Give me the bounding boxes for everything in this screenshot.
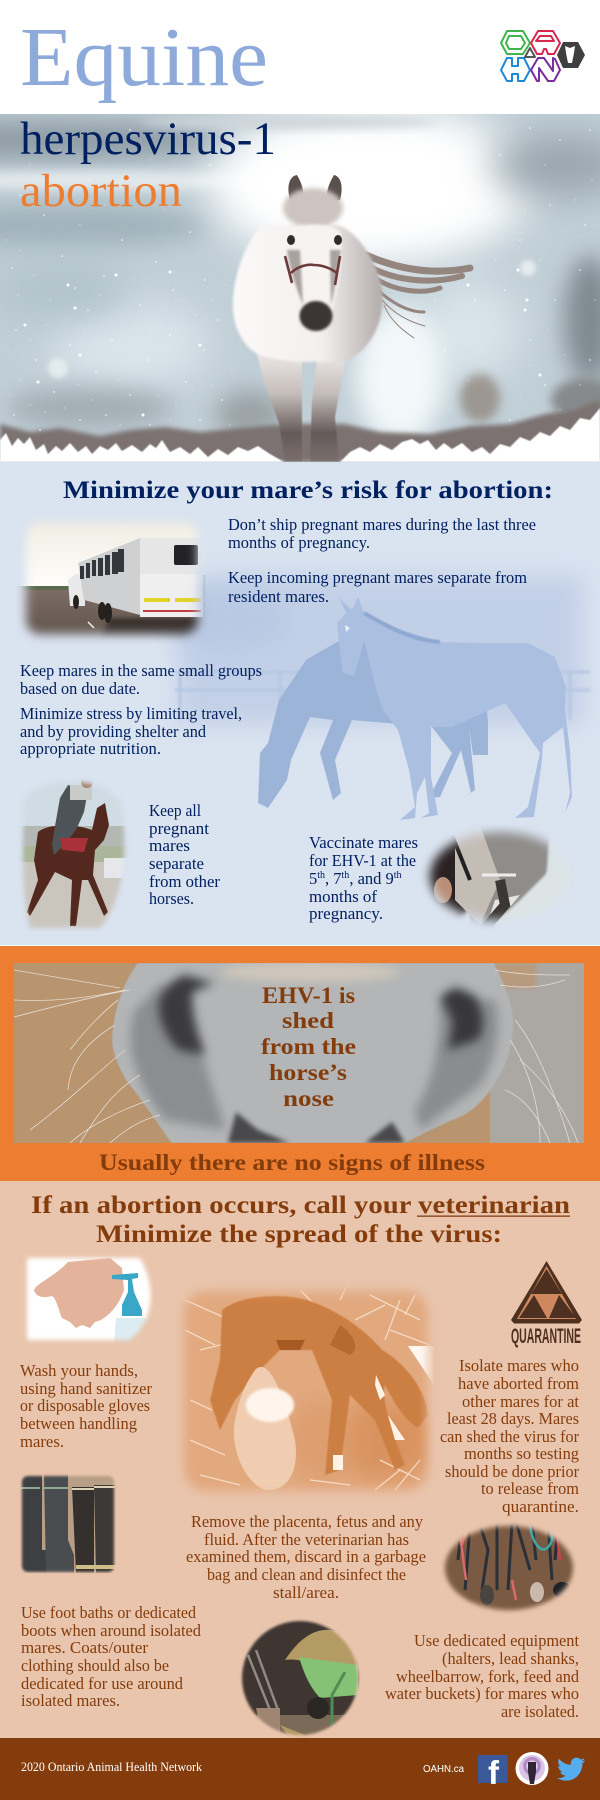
- head: [298, 224, 342, 309]
- hero photo: white horse in snow: [0, 105, 600, 462]
- text: vaccinate mares: for EHV-1 at the: [309, 851, 416, 870]
- text: EHV-1 is shed from the horse's nose: shed: [282, 1008, 334, 1033]
- photo: hand and sanitizer pump: [24, 1255, 154, 1343]
- text: dedicated equipment: (halters, lead shanks,: [442, 1649, 579, 1668]
- photo: rubber boots: [20, 1474, 116, 1574]
- text: isolate mares: other mares for at: [462, 1392, 579, 1411]
- grazing horse: [258, 640, 488, 808]
- standing horse: [337, 597, 572, 820]
- text: keep incoming: [228, 568, 527, 606]
- heading: call your veterinarian: [31, 1192, 570, 1248]
- mane: [283, 188, 343, 228]
- text: isolate mares: [440, 1356, 579, 1516]
- text: same small groups: [20, 661, 262, 698]
- icon: quarantine triangle: [511, 1261, 582, 1348]
- text: website: OAHN.ca: [423, 1764, 464, 1775]
- text: isolate mares: quarantine.: [502, 1497, 579, 1516]
- snowy ground: dark grass band: [0, 400, 600, 462]
- heading: call your veterinarian: If an abortion occurs, call your veterinarian: [31, 1192, 570, 1219]
- text: keep all pregnant mares separate: pregnant: [149, 819, 209, 838]
- legs: [256, 350, 302, 461]
- text: vaccinate mares: , and 9: [349, 869, 394, 888]
- text: dedicated equipment: are isolated.: [501, 1702, 579, 1721]
- text: foot baths: Use foot baths or dedicated: [21, 1603, 197, 1622]
- ears: [288, 175, 303, 200]
- text: wash your hands: between handling: [20, 1414, 137, 1433]
- text: dedicated equipment: wheelbarrow, fork, feed and: [396, 1667, 580, 1686]
- text: minimize stress: [20, 704, 242, 758]
- photo: wheelbarrow with hay: [240, 1619, 360, 1737]
- text: remove the placenta: bag and clean and disinfect the: [207, 1565, 406, 1584]
- text: isolate mares: months so testing: [464, 1444, 579, 1463]
- text: foot baths: clothing should also be: [21, 1656, 169, 1675]
- text: same small groups: Keep mares in the same small groups: [20, 661, 262, 680]
- text: vaccinate mares: th: [394, 870, 402, 881]
- photo: truck and horse trailer: [18, 520, 206, 642]
- herpesvirus-1: herpesvirus-1: [20, 113, 276, 165]
- text: keep all pregnant mares separate: separate: [149, 854, 204, 873]
- text: minimize stress: Minimize stress by limiting travel,: [20, 704, 242, 723]
- heading: Minimize your mare’s risk for abortion:: [63, 477, 553, 504]
- text: keep all pregnant mares separate: Keep all: [149, 801, 201, 820]
- footer: [0, 1738, 600, 1800]
- text: remove the placenta: Remove the placenta, fetus and any: [191, 1512, 424, 1531]
- horse: [233, 175, 470, 461]
- text: isolate mares: should be done prior: [445, 1462, 579, 1481]
- text: EHV-1 is shed from the horse's nose: horse’s: [269, 1060, 347, 1085]
- text: dedicated equipment: water buckets) for mares who: [385, 1684, 579, 1703]
- text: vaccinate mares: Vaccinate mares: [309, 833, 418, 852]
- snowflakes: [6, 125, 595, 430]
- tail: [366, 255, 470, 338]
- text: same small groups: based on due date.: [20, 679, 140, 698]
- text: vaccinate mares: th: [317, 870, 325, 881]
- text: keep incoming: Keep incoming pregnant mares separate from: [228, 568, 527, 587]
- text: remove the placenta: stall/area.: [273, 1583, 339, 1602]
- text: isolate mares: Isolate mares who: [459, 1356, 579, 1375]
- text: EHV-1 is shed from the horse's nose: EHV-1 is: [262, 983, 355, 1008]
- text: dedicated equipment: Use dedicated equipment: [414, 1631, 579, 1650]
- text: vaccinate mares: pregnancy.: [309, 904, 383, 923]
- body: [233, 225, 382, 362]
- text: don't ship: months of pregnancy.: [228, 533, 370, 552]
- text: vaccinate mares: [309, 833, 418, 923]
- logo: OAHN hexagons: [501, 31, 585, 81]
- text: usually no signs of illness: Usually there are no signs of illness: [99, 1150, 485, 1175]
- text: wash your hands: using hand sanitizer: [20, 1379, 153, 1398]
- text: keep incoming: resident mares.: [228, 587, 329, 606]
- text: copyright: 2020 Ontario Animal Health Network: [21, 1760, 203, 1774]
- text: foot baths: isolated mares.: [21, 1691, 120, 1710]
- text: EHV-1 is shed from the horse's nose: [261, 983, 356, 1111]
- text: dedicated equipment: [385, 1631, 580, 1721]
- text: remove the placenta: [186, 1512, 426, 1602]
- icon: facebook: f: [488, 1754, 500, 1791]
- photo: jockey on racehorse: [20, 779, 128, 930]
- text: vaccinate mares: , 7: [325, 869, 342, 888]
- text: keep all pregnant mares separate: mares: [149, 836, 190, 855]
- text: vaccinate mares: 5: [309, 869, 317, 888]
- text: don't ship: [228, 515, 536, 552]
- text: wash your hands: or disposable gloves: [20, 1396, 150, 1415]
- icon: facebook: [478, 1754, 508, 1791]
- text: remove the placenta: fluid. After the veterinarian has: [204, 1530, 409, 1549]
- panel: if an abortion occurs: [0, 1181, 600, 1740]
- icon: podcast: [516, 1752, 548, 1785]
- text: isolate mares: have aborted from: [458, 1374, 579, 1393]
- abortion: abortion: [20, 165, 182, 217]
- text: foot baths: boots when around isolated: [21, 1621, 202, 1640]
- text: wash your hands: Wash your hands,: [20, 1361, 138, 1380]
- text: minimize stress: appropriate nutrition.: [20, 739, 161, 758]
- icon: twitter: [557, 1758, 585, 1781]
- photo: aborted foal, orange tint: [180, 1286, 434, 1496]
- text: keep all pregnant mares separate: horses.: [149, 889, 194, 908]
- header: title and logo: [20, 11, 585, 104]
- text: foot baths: [21, 1603, 202, 1710]
- text: don't ship: Don’t ship pregnant mares during the last three: [228, 515, 536, 534]
- panel: minimize risk: [0, 462, 600, 945]
- text: vaccinate mares: th: [342, 870, 349, 881]
- text: keep all pregnant mares separate: from other: [149, 872, 221, 891]
- heading: call your veterinarian: Minimize the spread of the virus:: [96, 1221, 502, 1248]
- text: keep all pregnant mares separate: [149, 801, 221, 908]
- sky and clouds: [0, 105, 600, 462]
- photo: vaccinating a horse: [422, 826, 567, 928]
- text: foot baths: mares. Coats/outer: [21, 1638, 149, 1657]
- halter: [285, 256, 340, 285]
- photo: horse nose close-up: [14, 962, 584, 1143]
- text: EHV-1 is shed from the horse's nose: nose: [283, 1086, 334, 1111]
- panel: orange band, shed from the nose: [0, 946, 600, 1181]
- text: wash your hands: [20, 1361, 153, 1451]
- text: isolate mares: to release from: [481, 1479, 579, 1498]
- text: remove the placenta: examined them, discard in a garbage: [186, 1547, 426, 1566]
- text: minimize stress: and by providing shelter and: [20, 722, 207, 741]
- text: wash your hands: mares.: [20, 1432, 64, 1451]
- text: isolate mares: can shed the virus for: [440, 1427, 579, 1446]
- hero title lines: [20, 113, 276, 217]
- muzzle: [300, 301, 332, 331]
- title: Equine: Equine: [20, 11, 268, 104]
- text: EHV-1 is shed from the horse's nose: from the: [261, 1034, 356, 1059]
- photo: hanging halters and lead ropes: [440, 1520, 580, 1615]
- text: isolate mares: least 28 days. Mares: [447, 1409, 579, 1428]
- background photo: two horses, blue tint: [170, 575, 590, 820]
- text: foot baths: dedicated for use around: [21, 1674, 184, 1693]
- text: vaccinate mares: months of: [309, 887, 378, 906]
